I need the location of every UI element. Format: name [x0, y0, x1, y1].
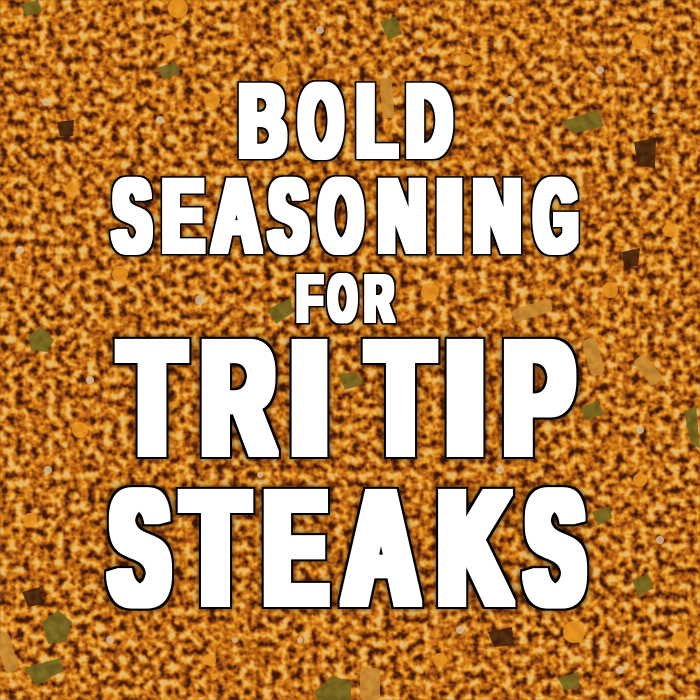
title: BOLD: L: [356, 63, 396, 180]
title: FOR: F: [296, 262, 322, 336]
title: BOLD: D: [406, 63, 452, 180]
title: SEASONING: N: [378, 158, 426, 275]
title: TRI TIP: [120, 306, 573, 489]
title: TRI TIP: T: [368, 306, 432, 489]
title: STEAKS: E: [264, 456, 326, 639]
title: BOLD: B: [239, 63, 286, 180]
title: STEAKS: T: [184, 456, 248, 639]
title: FOR: R: [364, 262, 394, 336]
title: TRI TIP: I: [443, 306, 487, 489]
title: SEASONING: S: [113, 158, 151, 275]
title: STEAKS: K: [438, 456, 510, 639]
title: FOR: [296, 262, 394, 336]
title: SEASONING: N: [473, 158, 521, 275]
title: TRI TIP: T: [120, 306, 184, 489]
title: TRI TIP: P: [504, 306, 573, 489]
title: STEAKS: S: [110, 456, 168, 639]
title: SEASONING: G: [534, 158, 578, 275]
title: SEASONING: [113, 158, 578, 275]
title: FOR: O: [328, 262, 356, 336]
title: STEAKS: [110, 456, 584, 639]
title: SEASONING: I: [434, 158, 466, 275]
title: TRI TIP: R: [202, 306, 274, 489]
title: SEASONING: E: [162, 158, 204, 275]
title: STEAKS: A: [344, 456, 418, 639]
title: BOLD: [239, 63, 452, 180]
title: SEASONING: S: [269, 158, 308, 275]
title: BOLD: O: [300, 63, 342, 180]
dark flakes: [22, 120, 656, 647]
title: SEASONING: O: [320, 158, 362, 275]
title: TRI TIP: I: [288, 306, 330, 489]
title: STEAKS: S: [526, 456, 584, 639]
title: SEASONING: A: [212, 158, 260, 275]
